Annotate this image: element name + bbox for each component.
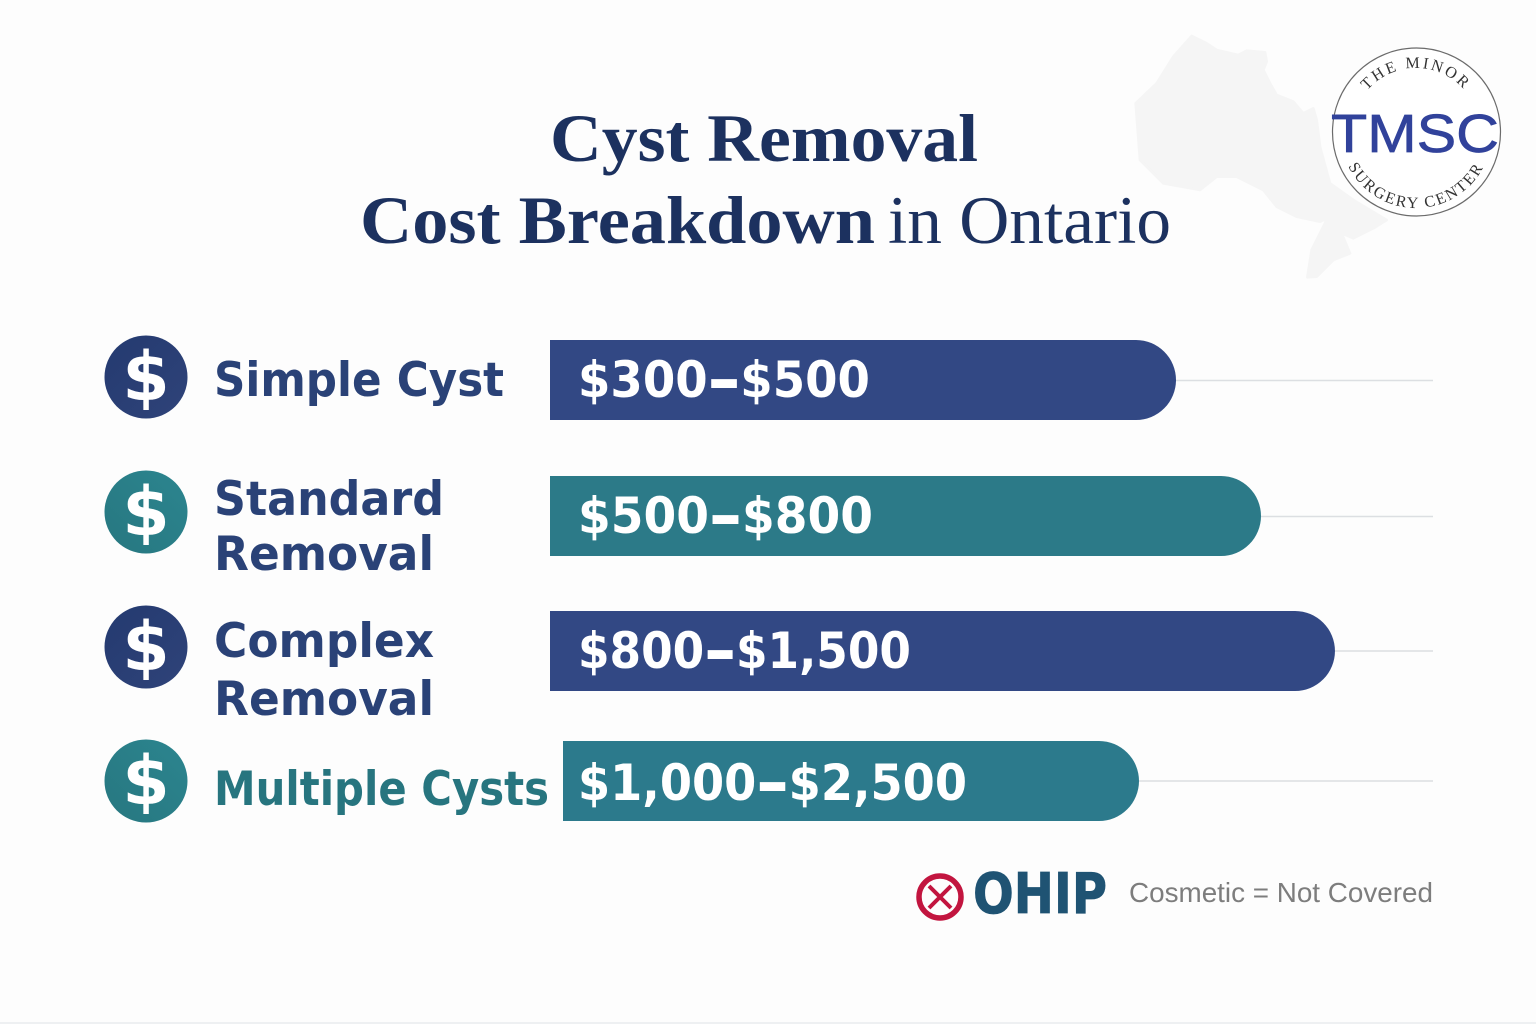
label: Simple Cyst: Simple Cyst <box>214 353 504 408</box>
price: $300–$500: $300 <box>578 351 717 409</box>
icon: dollar coin navy <box>104 336 188 418</box>
bar: $300–$500 <box>550 340 1176 420</box>
bar: $1,000–$2,500 <box>563 741 1139 821</box>
title: Cyst Removal <box>550 100 978 176</box>
row: Complex Removal <box>104 606 1433 727</box>
price: $500–$800: $500 <box>578 487 717 545</box>
icon: dollar coin teal: $ <box>122 473 170 552</box>
row: Standard Removal <box>104 470 1433 582</box>
label: Multiple Cysts: Multiple Cysts <box>214 762 549 817</box>
bar: $500–$800 <box>550 476 1261 556</box>
price: $800–$1,500: – <box>704 609 736 691</box>
price: $800–$1,500: $800 <box>578 622 717 680</box>
label: Standard Removal: Removal <box>214 527 434 582</box>
label: Complex Removal: Removal <box>214 672 434 727</box>
row: Simple Cyst <box>104 336 1433 420</box>
price: $500–$800: – <box>709 474 742 556</box>
label: Standard Removal: Standard <box>214 472 444 527</box>
price: $300–$500: $500 <box>740 351 870 409</box>
label: Complex Removal <box>214 614 434 727</box>
icon: dollar coin navy: $ <box>122 338 170 417</box>
bar: $800–$1,500 <box>550 611 1335 691</box>
title: Cost Breakdown <box>360 182 875 258</box>
coverage text: Cosmetic = Not Covered <box>1129 877 1433 908</box>
label: Complex Removal: Complex <box>214 614 434 669</box>
icon: dollar coin teal <box>104 740 188 822</box>
title: in Ontario <box>888 182 1171 258</box>
icon: dollar coin navy: $ <box>122 608 170 687</box>
OHIP label: OHIP <box>973 862 1107 927</box>
icon: dollar coin teal <box>104 470 188 554</box>
label: Standard Removal <box>214 472 444 582</box>
price: $300–$500: – <box>708 338 740 420</box>
row: Multiple Cysts <box>104 740 1433 823</box>
logo: TMSC seal: TMSC <box>1331 104 1499 164</box>
note: OHIP not covered <box>919 862 1433 927</box>
price: $500–$800: $800 <box>742 487 873 545</box>
icon: red cross circle <box>919 876 961 918</box>
icon: dollar coin navy <box>104 606 188 688</box>
price: $800–$1,500: $1,500 <box>736 622 911 680</box>
price: $1,000–$2,500: $2,500 <box>789 754 967 812</box>
icon: dollar coin teal: $ <box>122 742 170 821</box>
map: Ontario silhouette <box>1136 36 1387 277</box>
price: $1,000–$2,500: – <box>756 741 789 823</box>
price: $1,000–$2,500: $1,000 <box>578 754 771 812</box>
title <box>360 100 1171 258</box>
logo: TMSC seal <box>1331 47 1502 217</box>
logo: TMSC seal: SURGERY CENTER <box>1348 162 1483 208</box>
logo: TMSC seal: THE MINOR <box>1360 57 1468 89</box>
